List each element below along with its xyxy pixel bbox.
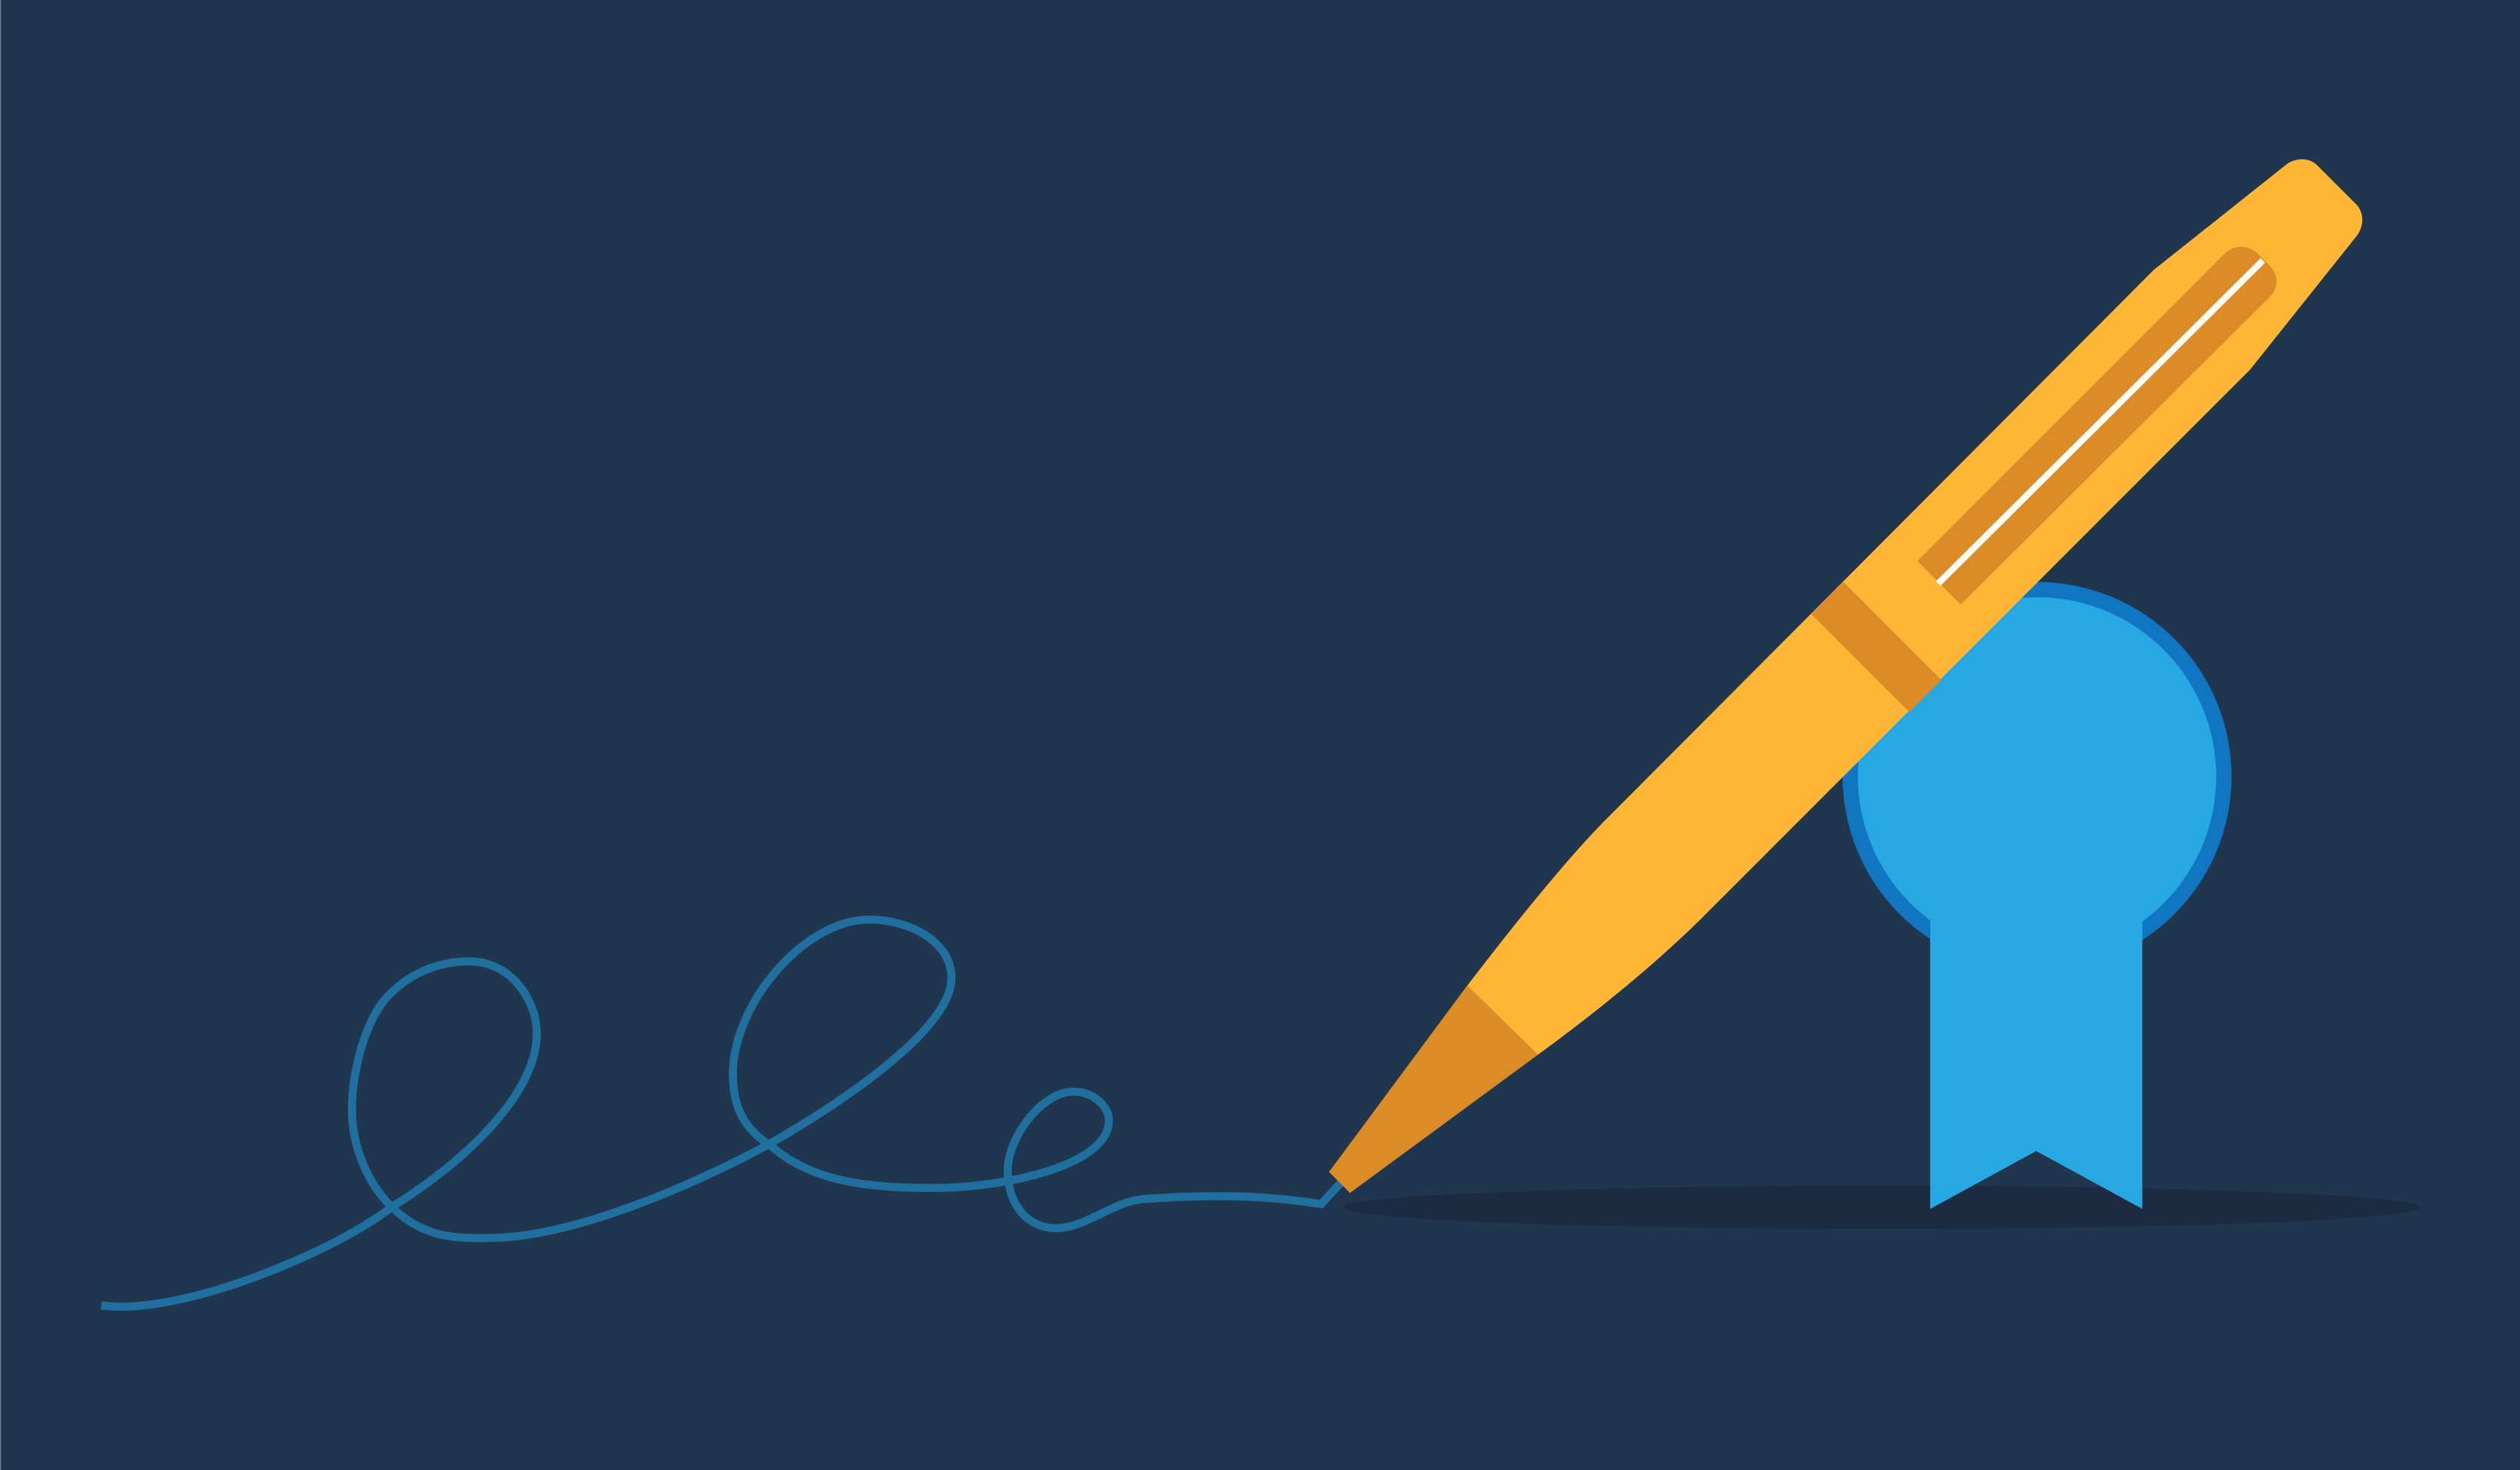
signature line (101, 919, 1340, 1307)
ribbon tail (1930, 919, 2142, 1209)
clip highlight (1939, 261, 2262, 584)
pen nib section (1329, 986, 1538, 1193)
badge inner disc (1858, 598, 2216, 956)
pen clip (1917, 247, 2277, 604)
pen band (1811, 582, 1942, 712)
award ribbon badge (1843, 582, 2232, 1209)
badge outer ring (1843, 582, 2232, 971)
pen body (1329, 159, 2362, 1193)
pen (1329, 159, 2362, 1193)
ground shadow (1343, 1186, 2420, 1229)
